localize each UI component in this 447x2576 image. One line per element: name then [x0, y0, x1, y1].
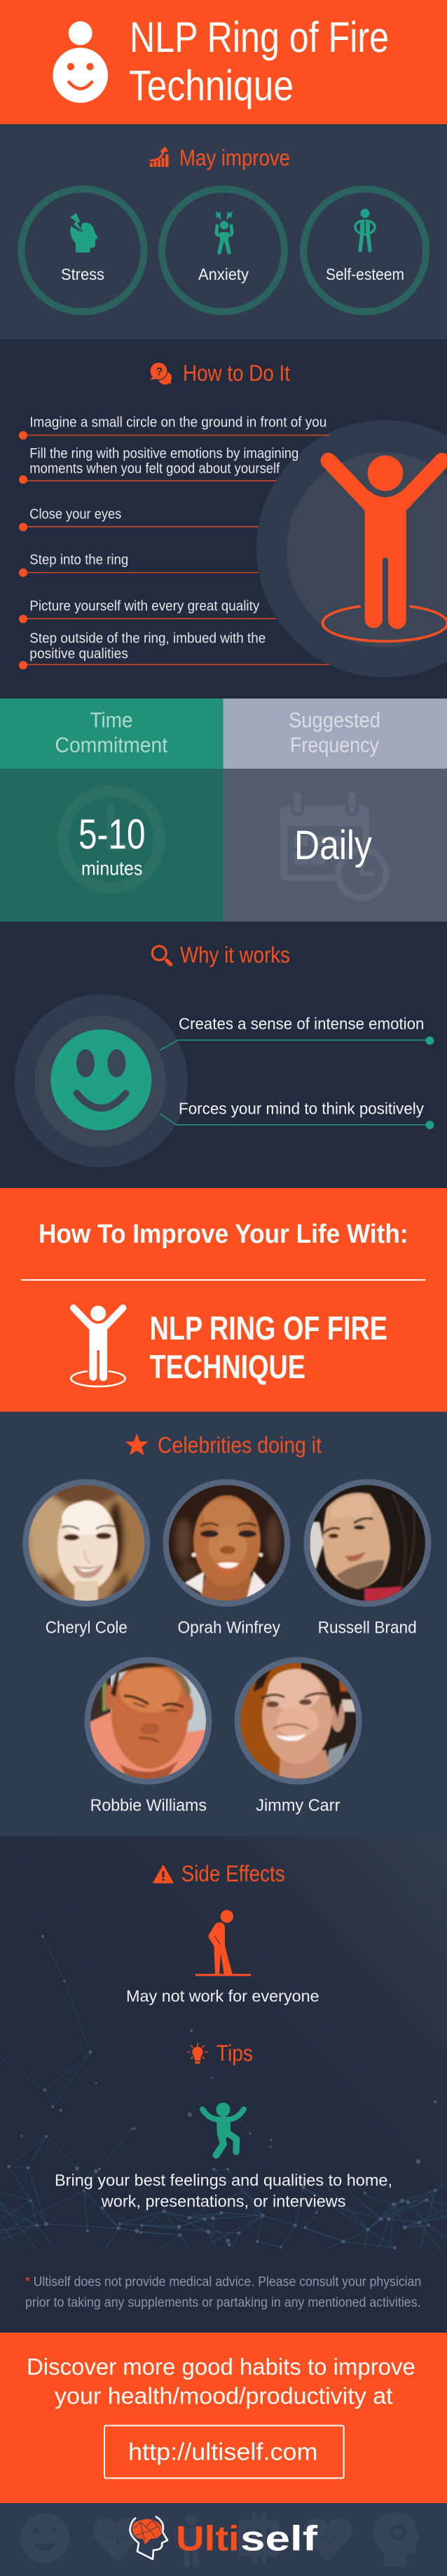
panel: call to action — [0, 2333, 447, 2503]
title — [129, 13, 389, 109]
panel: time commitment — [0, 699, 223, 922]
title: NLP Ring of Fire — [130, 13, 389, 61]
portrait: Jimmy Carr — [235, 1657, 362, 1785]
heading: how to improve: How To Improve Your Life With: — [39, 1220, 408, 1249]
step 5: Picture yourself with every great quality — [29, 598, 259, 614]
item: self-esteem — [303, 189, 426, 311]
label: Robbie Williams: Robbie Williams — [90, 1796, 207, 1815]
icon: magnifier — [152, 946, 171, 964]
label: Cheryl Cole: Cheryl Cole — [46, 1619, 128, 1638]
logo: Ultiself: self — [240, 2519, 317, 2558]
step 5 — [19, 598, 276, 623]
panel: footer — [0, 2503, 447, 2576]
portrait: Russell Brand — [303, 1479, 431, 1607]
logo: Ultiself: Ulti — [176, 2519, 240, 2558]
button: url — [104, 2425, 344, 2479]
step 3 — [19, 506, 259, 532]
background: network constellation — [0, 1935, 447, 2250]
icon: white person in ring — [70, 1304, 126, 1387]
icon: question bubbles — [150, 362, 172, 384]
text: tip — [55, 2171, 392, 2211]
step 4 — [19, 553, 259, 576]
label: Russell Brand: Russell Brand — [318, 1619, 417, 1638]
value: 5-10 minutes: 5-10 — [78, 811, 146, 858]
text: tip: work, presentations, or interviews — [101, 2192, 346, 2211]
text: disclaimer: * Ultiself does not provide medical advice. Please consult your physician — [25, 2274, 421, 2289]
icon: rising chart — [150, 147, 169, 167]
heading: how to do it — [150, 360, 290, 386]
callout: think positively: Forces your mind to think positively — [179, 1099, 424, 1117]
background: faint icons — [20, 2513, 420, 2567]
step 1: Imagine a small circle on the ground in front of you — [29, 415, 326, 431]
item: self-esteem: Self-esteem — [326, 265, 404, 283]
title: Technique — [129, 62, 294, 109]
icon: anxious figure — [216, 211, 233, 252]
panel: how to do it — [0, 339, 447, 699]
text: discover more — [27, 2354, 415, 2408]
icon: lightbulb — [188, 2044, 207, 2063]
heading: why it works: Why it works — [180, 943, 290, 968]
illustration: smiley — [15, 994, 188, 1167]
panel: disclaimer — [0, 2250, 447, 2333]
panel: side effects and tips — [0, 1836, 447, 2250]
value: 5-10 minutes: minutes — [81, 858, 142, 879]
icon: faint clock — [63, 791, 160, 888]
icon: question bubbles: ? — [156, 366, 163, 378]
panel: how to improve banner — [0, 1188, 447, 1412]
step 6: positive qualities — [29, 646, 128, 661]
step 6 — [19, 631, 329, 669]
step 1 — [19, 415, 329, 440]
item: stress: Stress — [61, 265, 104, 283]
heading: suggested frequency: Frequency — [290, 733, 379, 757]
icon: warning triangle — [153, 1866, 173, 1882]
icon: star — [126, 1434, 147, 1455]
value: 5-10 minutes — [78, 811, 146, 879]
icon: faint calendar with clock — [280, 792, 386, 898]
item: stress — [21, 189, 144, 311]
item: anxiety — [162, 189, 284, 311]
icon: dejected figure — [195, 1910, 251, 1975]
heading: how to do it: How to Do It — [183, 360, 290, 386]
step 6: Step outside of the ring, imbued with the — [29, 631, 266, 647]
button: url: http://ultiself.com — [128, 2439, 318, 2465]
heading: side effects: Side Effects — [181, 1861, 285, 1886]
illustration: person in ring — [256, 420, 447, 677]
icon: head with lightning — [69, 213, 98, 252]
text: discover more: your health/mood/productivity at — [55, 2382, 393, 2408]
heading: celebrities doing it: Celebrities doing it — [158, 1433, 322, 1458]
icon: dancing figure — [202, 2103, 244, 2155]
panel: header — [0, 0, 447, 124]
icon: smiling person — [53, 21, 108, 103]
heading: time commitment: Time — [90, 708, 133, 732]
text: disclaimer: prior to taking any supplements or partaking in any mentioned activities. — [25, 2295, 420, 2310]
callout: intense emotion — [160, 1014, 434, 1051]
label: Oprah Winfrey: Oprah Winfrey — [178, 1619, 280, 1638]
label: Jimmy Carr: Jimmy Carr — [256, 1796, 340, 1815]
callout: think positively — [160, 1099, 434, 1129]
text: disclaimer — [25, 2274, 421, 2310]
title: technique name — [150, 1309, 387, 1385]
heading: tips: Tips — [216, 2040, 253, 2065]
logo: Ultiself — [130, 2516, 317, 2559]
panel: why it works — [0, 922, 447, 1188]
icon: confident figure — [355, 209, 375, 250]
text: tip: Bring your best feelings and qualities to home, — [55, 2171, 392, 2190]
callout: intense emotion: Creates a sense of intense emotion — [179, 1014, 424, 1032]
heading: time commitment — [55, 708, 168, 757]
title: technique name: NLP RING OF FIRE — [150, 1309, 387, 1347]
value: daily: Daily — [294, 823, 372, 868]
panel: suggested frequency — [223, 699, 447, 922]
heading: may improve: May improve — [179, 145, 290, 170]
step 4: Step into the ring — [29, 553, 128, 568]
heading: suggested frequency — [289, 708, 380, 757]
portrait: Cheryl Cole — [22, 1476, 150, 1607]
text: may not work: May not work for everyone — [126, 1987, 319, 2005]
heading: suggested frequency: Suggested — [289, 708, 380, 732]
icon: brain head — [130, 2516, 167, 2559]
step 2 — [19, 446, 298, 484]
portrait: Robbie Williams — [84, 1657, 212, 1785]
panel: may improve — [0, 124, 447, 339]
portrait: Oprah Winfrey — [163, 1479, 290, 1607]
heading: tips — [188, 2040, 253, 2065]
panel: celebrities — [0, 1412, 447, 1836]
step 3: Close your eyes — [29, 506, 121, 522]
text: discover more: Discover more good habits to improve — [27, 2354, 415, 2380]
item: anxiety: Anxiety — [198, 265, 249, 283]
heading: time commitment: Commitment — [55, 733, 168, 757]
title: technique name: TECHNIQUE — [150, 1348, 305, 1385]
step 2: Fill the ring with positive emotions by imagining — [29, 446, 298, 461]
step 2: moments when you felt good about yourself — [29, 461, 280, 477]
